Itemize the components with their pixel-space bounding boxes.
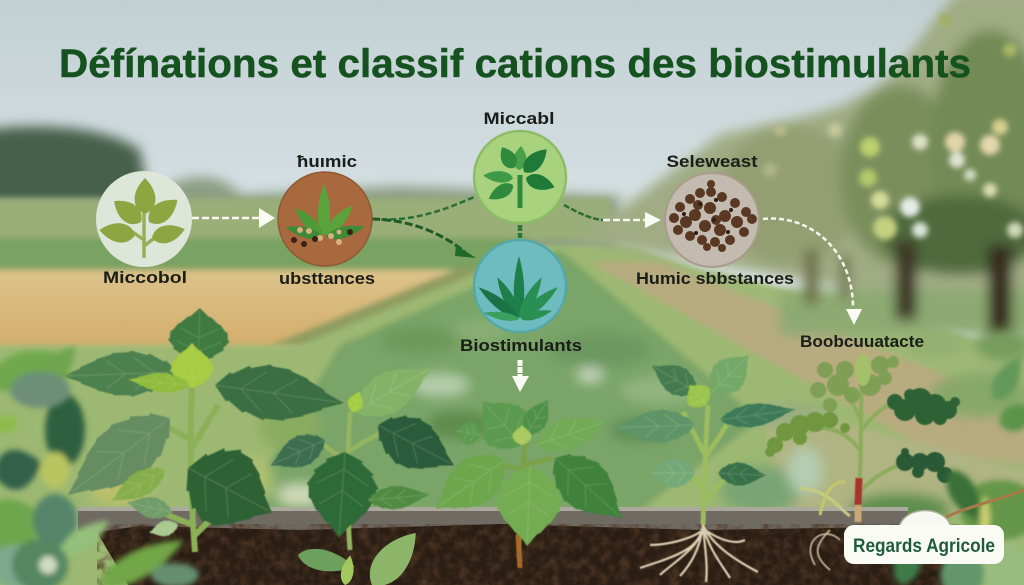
label: Miccabl: [484, 109, 554, 128]
logo badge: Regards Agricole: [844, 510, 1004, 564]
label: bottom: ubsttances: [279, 269, 375, 288]
logo badge: Regards Agricole: Regards Agricole: [853, 536, 995, 557]
plant 4 with roots: [614, 343, 797, 582]
node: Biostimulants: [460, 240, 582, 355]
icon: green leaf sprig: [96, 171, 192, 267]
plant 2: [264, 350, 466, 550]
node: Miccabl: [474, 109, 566, 223]
node: Seleweast: [636, 152, 794, 288]
label: Boobcuuatacte: Boobcuuatacte: [800, 332, 924, 351]
plant 5 curly: [765, 354, 960, 570]
arrow: Miccabl to Seleweast: [564, 205, 661, 228]
arrow: Miccobol to humic: [192, 208, 275, 228]
node: Miccobol: [96, 171, 192, 287]
arrow: humic to Biostimulants: [372, 219, 476, 258]
icon: teal circle with plant: [474, 240, 566, 332]
curly clusters: [810, 356, 899, 412]
arrow: Biostimulants down: [512, 360, 529, 392]
foreground blurred leaves: [0, 337, 1024, 585]
arrow: Seleweast to Boobcuuatacte: [763, 219, 862, 325]
roots: [640, 525, 758, 582]
arrow: humic to Miccabl: [372, 197, 474, 220]
label: Miccobol: [103, 268, 187, 287]
connector: Miccabl to Biostimulants: [518, 225, 522, 238]
plant 1: [50, 307, 348, 552]
node: humic substances: [278, 152, 375, 288]
icon: green plant: [474, 131, 566, 223]
label: top: Seleweast: [666, 152, 758, 171]
bokeh crop rows: [90, 318, 1024, 526]
label: Biostimulants: [460, 336, 582, 355]
label: bottom: Humic sbbstances: [636, 269, 794, 288]
orchard trees: [575, 0, 1024, 340]
icon: plant in soil: [278, 172, 372, 266]
planter board and soil: [78, 507, 960, 585]
title: Défínations et classif cations des biostimulants: [59, 42, 971, 86]
icon: brown granules: [665, 173, 759, 267]
plant 3: [421, 385, 639, 568]
label: top: ħuımic: [297, 152, 357, 171]
